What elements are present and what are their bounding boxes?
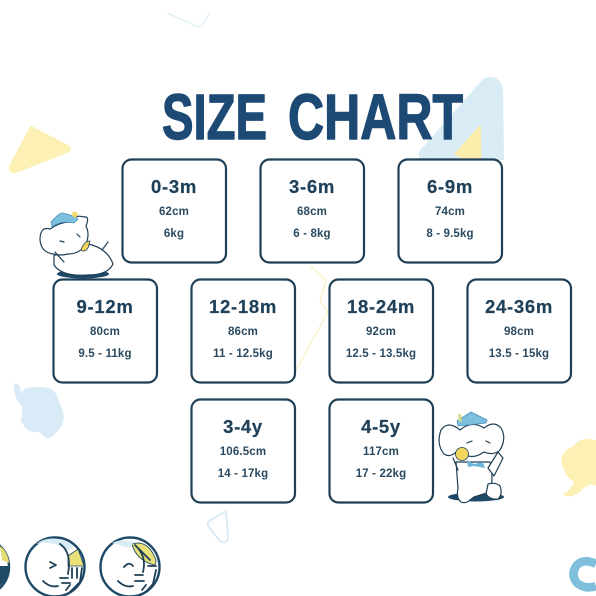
- card: 18-24m: 18-24m: [347, 296, 415, 317]
- outline triangle bottom: [208, 511, 228, 542]
- card: 4-5y: 117cm: [363, 446, 399, 458]
- card: 9-12m: 9-12m: [77, 296, 133, 317]
- icon: partial baby face badge: [0, 538, 9, 596]
- card: 18-24m: [330, 280, 433, 382]
- card: 12-18m: 86cm: [228, 326, 258, 338]
- pale blue triangle behind title: [419, 77, 504, 160]
- card: 12-18m: 11 - 12.5kg: [213, 348, 273, 360]
- card: 6-9m: 74cm: [435, 206, 465, 218]
- background outline shape top: [167, 12, 210, 27]
- card: 3-4y: 3-4y: [223, 416, 263, 437]
- card: 4-5y: 4-5y: [361, 416, 401, 437]
- yellow triangle behind title: [455, 126, 481, 168]
- icon: smiling baby face badge: [100, 538, 160, 596]
- card: 6-9m: 8 - 9.5kg: [426, 228, 474, 240]
- card: 12-18m: 12-18m: [209, 296, 277, 317]
- card: 6-9m: [398, 160, 502, 262]
- card: 0-3m: 0-3m: [151, 176, 197, 197]
- card: 12-18m: [192, 280, 295, 382]
- card: 0-3m: 62cm: [159, 206, 189, 218]
- card: 24-36m: 24-36m: [485, 296, 553, 317]
- card: 3-6m: [260, 160, 364, 262]
- card: 6-9m: 6-9m: [427, 176, 473, 197]
- card: 0-3m: [122, 160, 226, 262]
- card: 18-24m: 92cm: [366, 326, 396, 338]
- card: 3-6m: 6 - 8kg: [293, 228, 331, 240]
- icon: sitting elephant: [439, 412, 504, 503]
- title: CHART: [288, 81, 463, 153]
- card: 9-12m: 9.5 - 11kg: [78, 348, 132, 360]
- card: 0-3m: 6kg: [164, 228, 184, 240]
- card: 18-24m: 12.5 - 13.5kg: [346, 348, 416, 360]
- yellow elephant silhouette: [561, 439, 596, 496]
- card: 9-12m: 80cm: [90, 326, 120, 338]
- card: 24-36m: 13.5 - 15kg: [489, 348, 549, 360]
- title: SIZE: [162, 81, 267, 153]
- card: 24-36m: 98cm: [504, 326, 534, 338]
- pale yellow outline behind cards: [280, 266, 328, 385]
- card: 3-4y: [192, 400, 295, 502]
- card: 3-6m: 68cm: [297, 206, 327, 218]
- card: 24-36m: [468, 280, 571, 382]
- icon: lying elephant: [40, 211, 113, 278]
- brand logo letter: [574, 561, 596, 587]
- title: [162, 81, 463, 153]
- card: 9-12m: [54, 280, 157, 382]
- yellow triangle left: [10, 127, 70, 172]
- card: 3-6m: 3-6m: [289, 176, 335, 197]
- card: 3-4y: 106.5cm: [220, 446, 266, 458]
- icon: winking baby face badge: [26, 538, 84, 596]
- blue elephant silhouette: [14, 384, 64, 438]
- card: 4-5y: [330, 400, 433, 502]
- card: 4-5y: 17 - 22kg: [356, 468, 406, 480]
- card: 3-4y: 14 - 17kg: [218, 468, 268, 480]
